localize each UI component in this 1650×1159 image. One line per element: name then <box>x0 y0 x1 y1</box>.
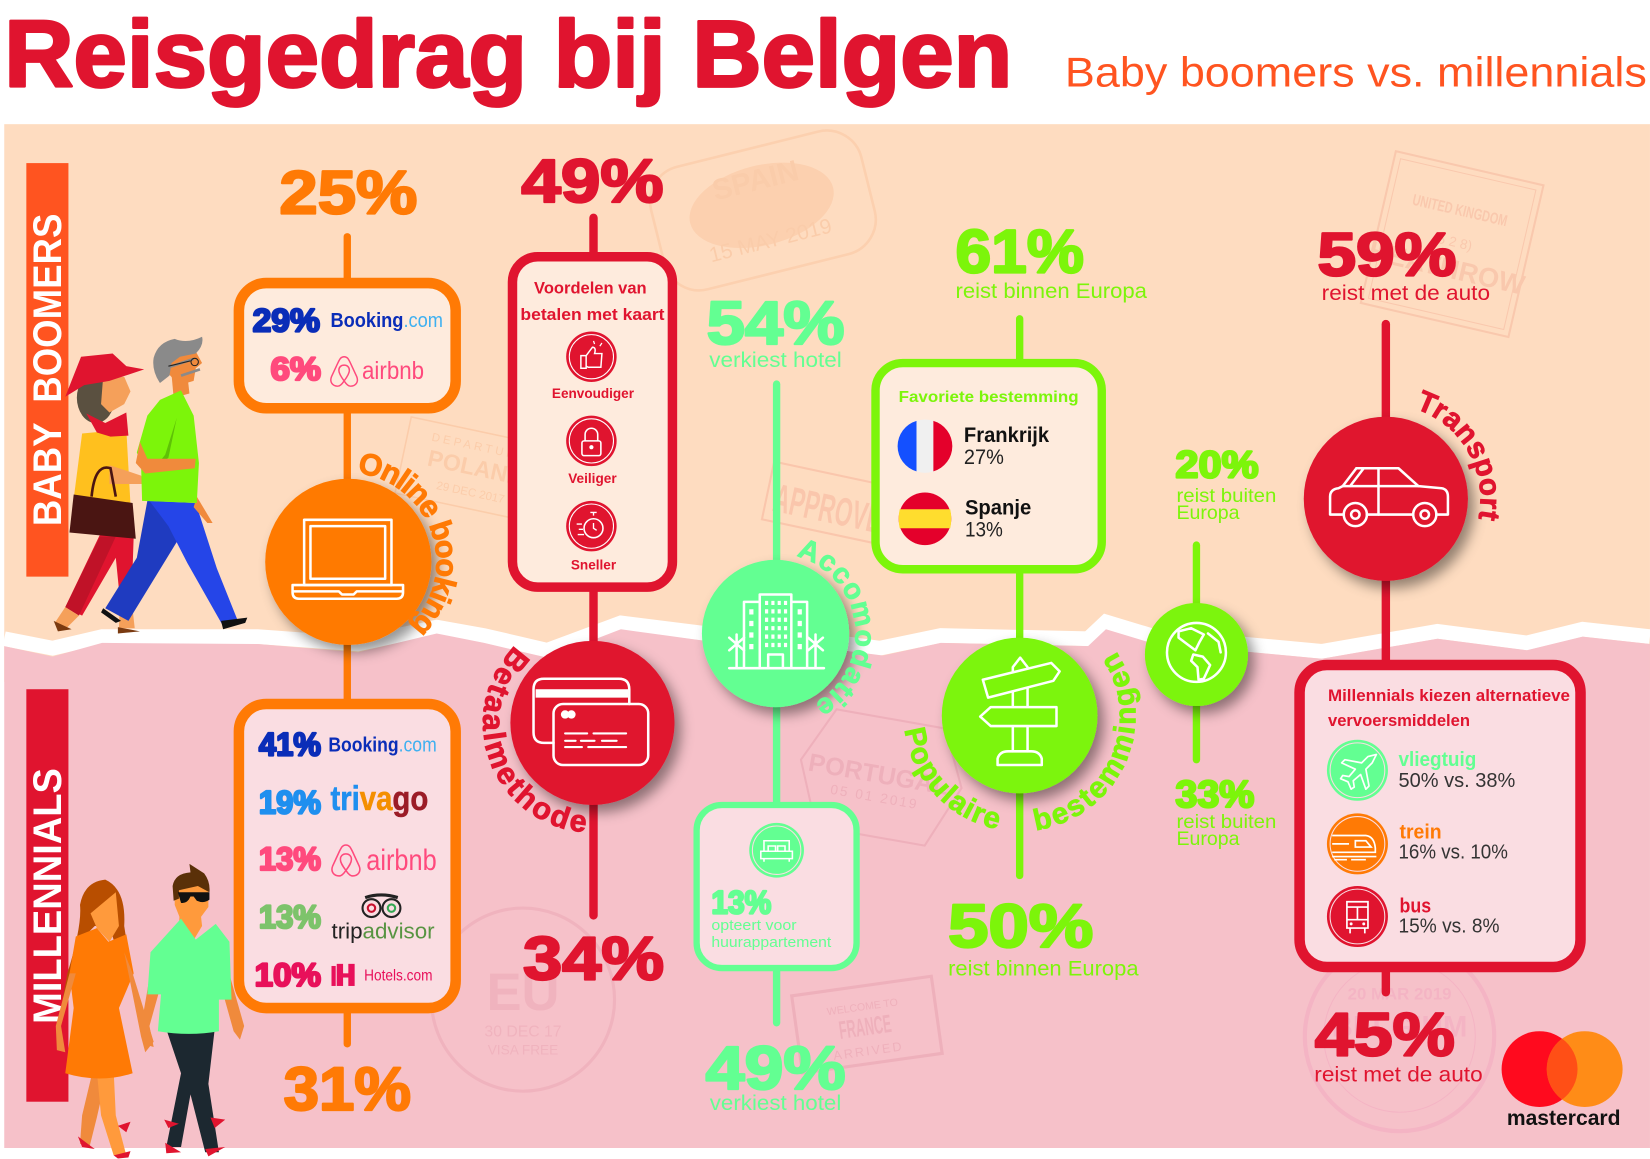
card heading <box>520 279 665 324</box>
tripadvisor 13%: 13% <box>259 898 321 935</box>
card: alternative transport <box>1300 665 1581 967</box>
Booking.com 29%: Booking.com <box>330 310 443 332</box>
stat: 50% reist binnen Europa: 50% <box>948 892 1093 960</box>
icon and data: vliegtuig <box>1327 740 1516 801</box>
stamp: Belgium: 20 MAR 2019 <box>1348 985 1451 1004</box>
stat: 54% verkiest hotel: verkiest hotel <box>709 349 842 372</box>
background: torn white edge <box>4 622 1650 651</box>
connector line <box>1193 545 1200 760</box>
stat: 49% verkiest hotel: 49% <box>706 1034 846 1102</box>
column: payment method <box>482 147 690 993</box>
icon and data: vliegtuig: vliegtuig <box>1398 749 1476 771</box>
stat: 20% reist buiten Europa: Europa <box>1176 503 1240 524</box>
side label: millennials: MILLENNIALS <box>26 768 70 1024</box>
stat: 20% reist buiten Europa: reist buiten <box>1176 486 1276 507</box>
curved label: Betaalmethode: Betaalmethode <box>482 646 586 832</box>
stat: 59% reist met de auto: 59% <box>1317 221 1456 289</box>
stamp: Approved <box>762 462 912 549</box>
stat: 50% reist binnen Europa <box>948 892 1139 980</box>
column: online booking <box>234 159 461 1123</box>
stamp: EU: 30 DEC 17 <box>484 1023 562 1040</box>
stamp: United Kingdom: (5 2 8) <box>1432 230 1474 254</box>
stamp: Poland <box>395 417 555 524</box>
stat: 20% reist buiten Europa <box>1175 445 1276 524</box>
icon: padlock, Veiliger <box>566 416 617 486</box>
stat: 45% reist met de auto <box>1314 1000 1483 1087</box>
icon and data: trein: 16% vs. 10% <box>1398 842 1508 864</box>
stat: 45% reist met de auto: 45% <box>1315 1000 1455 1068</box>
flag: France: 27% <box>964 446 1004 469</box>
Hotels.com 10%: 10% <box>255 956 321 993</box>
stamp: United Kingdom: HEATHROW <box>1366 235 1528 301</box>
icon: stopwatch, Sneller: Sneller <box>571 557 617 572</box>
stamp: Spain: SPAIN <box>709 154 802 207</box>
stamp: Poland: 29 DEC 2017 <box>435 480 506 506</box>
flag: Spain <box>899 492 1031 545</box>
tripadvisor 13%: tripadvisor <box>331 919 435 944</box>
trivago 19% <box>259 780 428 820</box>
stat: 13% opteert voor huurappartement: 13% <box>711 883 771 920</box>
icon: bed <box>749 823 804 878</box>
stat: 13% opteert voor huurappartement: opteert voor <box>711 918 797 934</box>
stat: 33% reist buiten Europa: 33% <box>1175 774 1254 816</box>
card heading: betalen met kaart <box>520 305 665 324</box>
icon: thumbs up, Eenvoudiger <box>552 331 635 401</box>
airbnb 13%: airbnb <box>366 844 437 877</box>
side label: millennials <box>26 689 70 1102</box>
icon: signpost <box>942 638 1098 793</box>
stamp: Portugal <box>790 705 971 850</box>
icon: bank cards <box>510 641 675 805</box>
stamp: Poland: POLAND <box>425 445 526 490</box>
icon: stopwatch, Sneller <box>566 501 617 572</box>
icon and data: bus <box>1327 886 1500 947</box>
stat: 13% opteert voor huurappartement: huurappartement <box>711 935 831 951</box>
connector line <box>773 384 780 1023</box>
icon and data: vliegtuig: 50% vs. 38% <box>1398 770 1516 792</box>
stamp: France <box>792 976 942 1073</box>
title: Reisgedrag bij Belgen <box>4 1 1012 107</box>
stamp: United Kingdom <box>1357 150 1547 338</box>
icon: hotel <box>702 560 849 707</box>
stamp: EU <box>431 908 615 1091</box>
airbnb 6% <box>270 350 424 387</box>
tripadvisor 13% <box>259 895 435 944</box>
stat: 45% reist met de auto: reist met de auto <box>1314 1064 1483 1087</box>
stamp: Approved: APPROVED <box>769 476 902 546</box>
column: outside Europe <box>1145 445 1276 850</box>
stat: 13% opteert voor huurappartement <box>711 883 831 951</box>
icon and data: bus: bus <box>1400 895 1431 917</box>
connector line <box>590 218 598 915</box>
stat: 61% reist binnen Europa: 61% <box>955 218 1084 286</box>
stamp: Portugal: 05 01 2019 <box>829 782 920 812</box>
airbnb 13%: 13% <box>259 840 321 877</box>
stat: 49%: 49% <box>521 147 663 215</box>
stamp: France: WELCOME TO <box>826 996 899 1018</box>
stamp: Poland: DEPARTURE <box>430 432 529 464</box>
stamp: Spain <box>642 123 883 298</box>
stamp: United Kingdom: UNITED KINGDOM <box>1411 192 1509 230</box>
flag: France <box>898 420 1049 473</box>
card heading: Millennials kiezen alternatieve <box>1328 686 1570 705</box>
subtitle: Baby boomers vs. millennials <box>1065 48 1647 95</box>
stat: 59% reist met de auto <box>1317 221 1490 305</box>
column: accommodation <box>693 289 872 1115</box>
stat: 50% reist binnen Europa: reist binnen Europa <box>948 957 1139 980</box>
curved label: Accomodatie: Accomodatie <box>796 540 872 714</box>
stamp: Portugal: PORTUGAL <box>806 749 951 801</box>
icon: thumbs up, Eenvoudiger: Eenvoudiger <box>552 386 635 401</box>
stat: 31%: 31% <box>284 1055 411 1123</box>
stamp: EU: EU <box>486 963 560 1022</box>
background: millennials zone <box>4 629 1650 1148</box>
illustration: baby boomer man <box>101 337 247 629</box>
icon: laptop <box>265 479 431 645</box>
Booking.com 41%: 41% <box>259 726 321 763</box>
airbnb 6%: 6% <box>270 350 321 387</box>
column: popular destinations <box>871 218 1147 980</box>
stat: 33% reist buiten Europa <box>1175 774 1276 850</box>
illustration: millennial woman <box>56 880 154 1159</box>
Booking.com 41% <box>259 726 437 763</box>
illustration: baby boomer woman <box>54 354 145 633</box>
card: favourite destination <box>876 363 1102 569</box>
stat: 49% verkiest hotel: verkiest hotel <box>710 1092 841 1115</box>
card: benefits of card payment <box>512 257 672 587</box>
stamp: France: ARRIVED <box>833 1039 905 1063</box>
stat: 59% reist met de auto: reist met de auto <box>1322 282 1490 305</box>
stamp: Spain: 15 MAY 2019 <box>707 215 834 267</box>
curved label: bestemmingen: bestemmingen <box>1032 652 1140 831</box>
stamp: Belgium: BELGIUM <box>1332 1010 1467 1043</box>
stamp: EU: VISA FREE <box>488 1042 558 1057</box>
stat: 33% reist buiten Europa: reist buiten <box>1176 812 1276 833</box>
curved label: online booking: Online booking <box>360 454 458 636</box>
Booking.com 29% <box>253 301 443 338</box>
Booking.com 41%: Booking.com <box>328 734 437 756</box>
curved label: Populaire: Populaire <box>904 726 1000 828</box>
stat: 25%: 25% <box>279 159 417 227</box>
icon and data: bus: 15% vs. 8% <box>1398 915 1500 937</box>
Booking.com 29%: 29% <box>253 301 320 338</box>
flag: Spain: Spanje <box>965 497 1031 520</box>
curved label: Transport: Transport <box>1420 389 1499 522</box>
stat: 61% reist binnen Europa <box>955 218 1147 303</box>
card heading: Voordelen van <box>534 279 647 298</box>
connector line <box>1016 319 1023 875</box>
icon and data: trein <box>1327 813 1508 874</box>
column: transport <box>1294 221 1586 1087</box>
trivago 19%: trivago <box>330 780 428 818</box>
side label: baby boomers: BABY BOOMERS <box>26 214 70 526</box>
trivago 19%: 19% <box>259 783 321 820</box>
stat: 54% verkiest hotel: 54% <box>707 289 844 357</box>
flag: France: Frankrijk <box>964 424 1049 447</box>
background: baby boomers zone <box>4 124 1650 682</box>
logo: mastercard: mastercard <box>1507 1107 1621 1130</box>
icon: padlock, Veiliger: Veiliger <box>568 471 617 486</box>
flag: Spain: 13% <box>965 519 1003 542</box>
Hotels.com 10%: Hotels.com <box>364 968 433 985</box>
Hotels.com 10% <box>255 956 433 993</box>
icon: globe <box>1145 603 1248 706</box>
card: huurappartement <box>697 805 857 968</box>
card heading <box>1328 686 1570 730</box>
card: baby boomer booking sites <box>239 283 456 408</box>
stat: 20% reist buiten Europa: 20% <box>1175 445 1259 487</box>
stamp: France: FRANCE <box>837 1010 893 1045</box>
card heading: vervoersmiddelen <box>1328 711 1470 730</box>
illustration: millennial man <box>142 864 244 1156</box>
airbnb 6%: airbnb <box>362 357 424 385</box>
connector line <box>1382 324 1390 992</box>
airbnb 13% <box>259 840 437 877</box>
logo: mastercard <box>1502 1031 1623 1130</box>
stamp: Belgium <box>1305 942 1494 1131</box>
icon: car <box>1304 417 1468 581</box>
stat: 33% reist buiten Europa: Europa <box>1176 829 1240 850</box>
connector line <box>344 237 351 1044</box>
stat: 34%: 34% <box>523 925 664 993</box>
icon and data: trein: trein <box>1400 822 1442 844</box>
card: millennial booking sites <box>239 704 456 1008</box>
stat: 61% reist binnen Europa: reist binnen Europa <box>955 280 1147 303</box>
card: favourite destination: Favoriete bestemming <box>899 389 1079 406</box>
